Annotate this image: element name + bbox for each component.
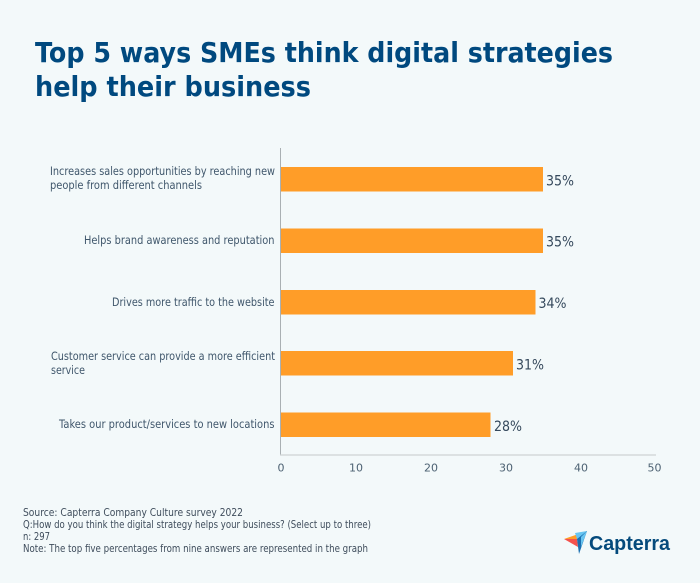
value labels: 35%: [546, 234, 574, 250]
axis tick labels: 20: [424, 462, 438, 474]
category labels: [50, 164, 275, 431]
bar chart: [50, 148, 662, 474]
value labels: 35%: [546, 174, 574, 190]
source notes: n: 297: [23, 530, 50, 543]
category labels: Takes our product/services to new locations: [58, 417, 275, 431]
source notes: Source: Capterra Company Culture survey 2022: [23, 506, 243, 519]
axis tick labels: 30: [499, 462, 513, 474]
axis tick labels: 40: [574, 462, 588, 474]
value labels: 34%: [538, 296, 566, 312]
source notes: [23, 506, 371, 555]
source notes: Q:How do you think the digital strategy helps your business? (Select up to three): [23, 518, 371, 531]
category labels: service: [51, 363, 85, 377]
title: help their business: [35, 70, 311, 103]
category labels: Drives more traffic to the website: [112, 295, 274, 309]
axis tick labels: [278, 462, 662, 474]
source notes: Note: The top five percentages from nine answers are represented in the graph: [23, 542, 368, 555]
category labels: Customer service can provide a more efficient: [51, 349, 275, 363]
icon: Capterra arrow: [564, 531, 587, 554]
logo wordmark: Capterra: [589, 533, 671, 555]
title: [35, 36, 613, 103]
category labels: Increases sales opportunities by reaching new: [50, 164, 275, 178]
axis tick labels: 0: [278, 462, 284, 474]
axis tick labels: 50: [648, 462, 662, 474]
category labels: people from different channels: [50, 178, 202, 192]
value labels: [494, 174, 574, 435]
category labels: Helps brand awareness and reputation: [84, 233, 274, 247]
title: Top 5 ways SMEs think digital strategies: [35, 36, 613, 69]
logo: Capterra: [564, 531, 671, 555]
value labels: 31%: [516, 358, 544, 374]
value labels: 28%: [494, 419, 522, 435]
bars: [280, 167, 543, 437]
axis tick labels: 10: [349, 462, 363, 474]
axes: [280, 148, 656, 455]
